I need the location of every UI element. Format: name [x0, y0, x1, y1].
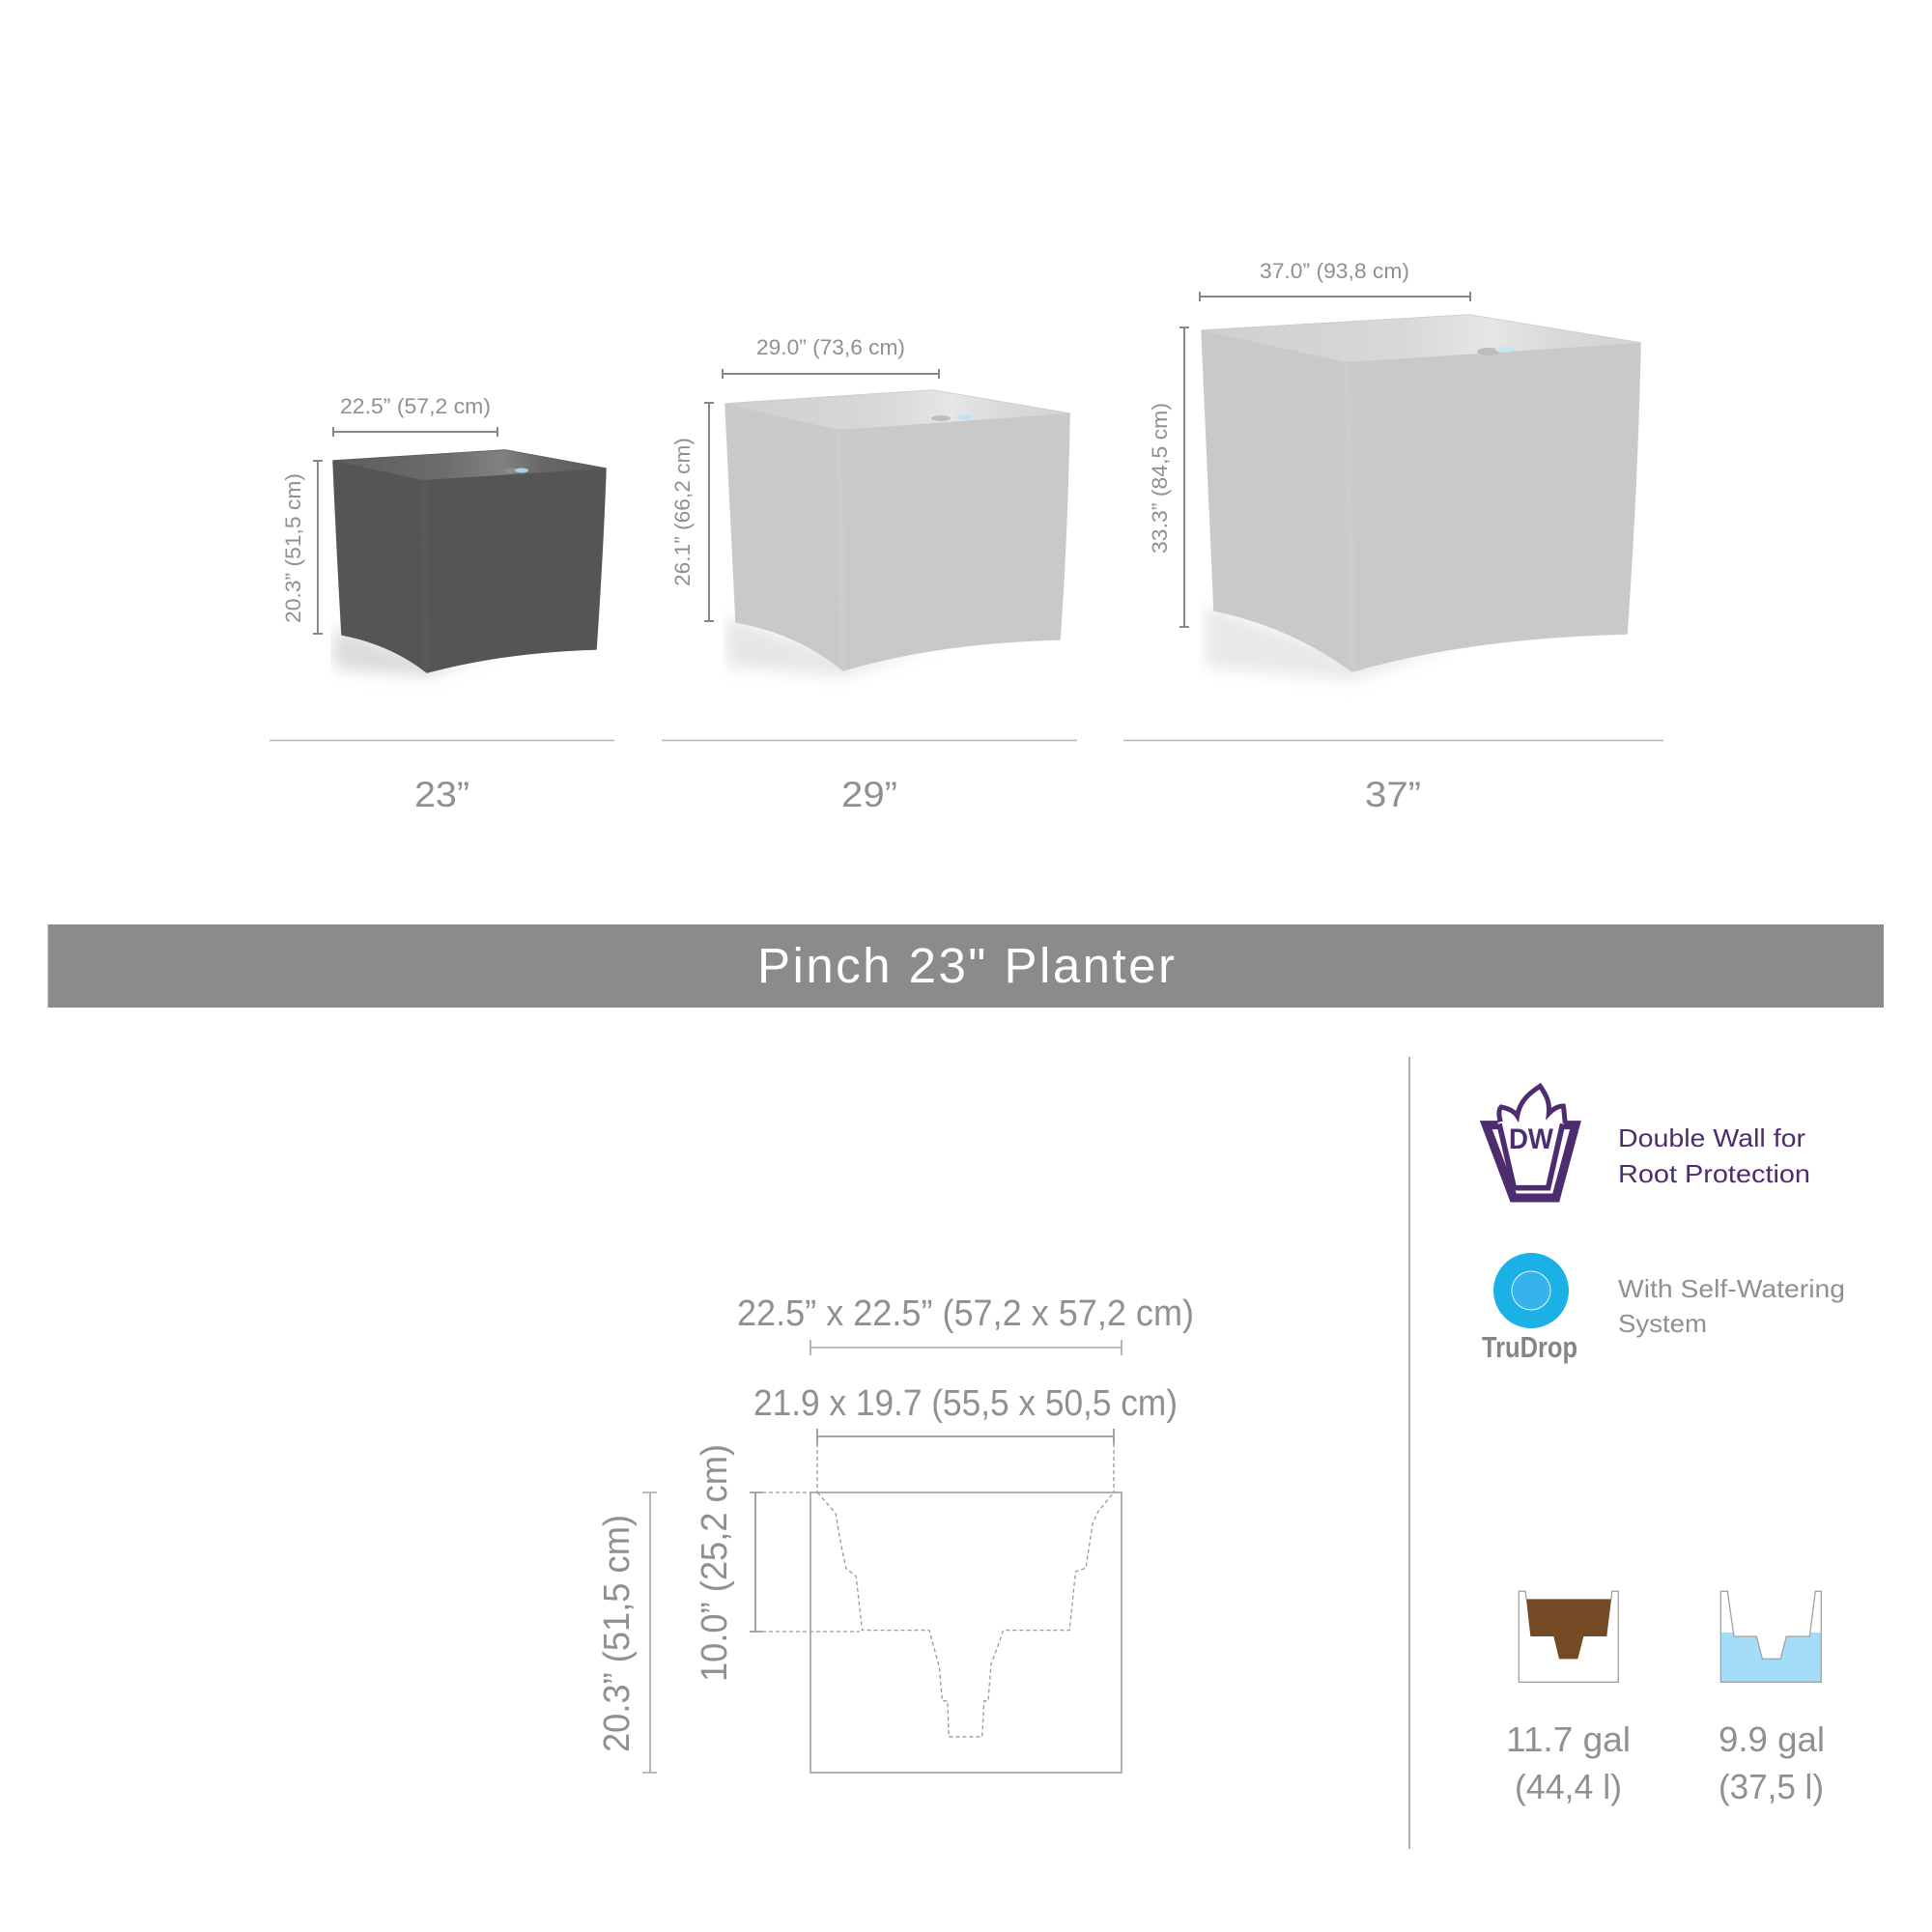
- icon: double wall: [1486, 1086, 1576, 1198]
- planter group: 29 inch: [670, 335, 1069, 676]
- width label: 29 inch: 29.0” (73,6 cm): [756, 335, 905, 359]
- technical cross-section drawing: [597, 1293, 1194, 1773]
- soil volume label: [1506, 1719, 1631, 1806]
- height dimension: 23 inch: [313, 461, 323, 634]
- height label: 37 inch: 33.3” (84,5 cm): [1148, 403, 1172, 554]
- text: double wall: Double Wall for: [1618, 1123, 1805, 1152]
- size label: 23: 23”: [414, 775, 469, 814]
- height label: 29 inch: 26.1” (66,2 cm): [670, 438, 695, 586]
- planter body: 29 inch light grey: [725, 390, 1069, 670]
- width dimension: 29 inch: [723, 369, 939, 379]
- inner width label: 21.9 x 19.7 (55,5 x 50,5 cm): [753, 1383, 1178, 1424]
- water volume label: (37,5 l): [1719, 1767, 1824, 1806]
- water volume label: [1719, 1719, 1825, 1806]
- height dimension: overall: [642, 1492, 657, 1773]
- size label: 37: 37”: [1365, 775, 1421, 814]
- text: self-watering: With Self-Watering: [1618, 1274, 1845, 1303]
- width label: 37 inch: 37.0” (93,8 cm): [1260, 259, 1409, 283]
- height dimension: 37 inch: [1179, 327, 1189, 627]
- inner reservoir dashed profile: [762, 1436, 1114, 1737]
- outer width dimension: [810, 1340, 1122, 1355]
- text: self-watering: System: [1618, 1309, 1707, 1338]
- planter group: 23 inch: [281, 394, 606, 676]
- planter shadow: 37 inch: [1204, 607, 1420, 682]
- planter group: 37 inch: [1148, 259, 1640, 680]
- size label: 29: 29”: [841, 775, 897, 814]
- planter shadow: 23 inch: [334, 628, 493, 676]
- soil volume label: 11.7 gal: [1506, 1719, 1631, 1759]
- title banner: [48, 924, 1884, 1008]
- height label: overall: 20.3” (51,5 cm): [597, 1515, 638, 1752]
- section divider: [1408, 1057, 1410, 1849]
- width dimension: 23 inch: [333, 427, 497, 437]
- icon: soil volume: [1519, 1591, 1618, 1682]
- depth label: inner: 10.0” (25,2 cm): [695, 1444, 735, 1682]
- size baselines: [270, 740, 1663, 742]
- title: Pinch 23" Planter: [757, 938, 1175, 993]
- text: double wall: [1618, 1123, 1810, 1188]
- width label: 23 inch: 22.5” (57,2 cm): [340, 394, 491, 418]
- planter outline box: [810, 1492, 1122, 1773]
- text: double wall: Root Protection: [1618, 1159, 1810, 1188]
- planter body: 37 inch light grey: [1202, 315, 1640, 671]
- planter shadow: 29 inch: [724, 618, 899, 678]
- icon: water volume: [1720, 1591, 1821, 1682]
- icon: TruDrop: TruDrop: [1482, 1330, 1577, 1364]
- height label: 23 inch: 20.3” (51,5 cm): [281, 473, 305, 623]
- width dimension: 37 inch: [1200, 292, 1470, 301]
- planter body: 23 inch charcoal: [333, 450, 606, 672]
- water volume label: 9.9 gal: [1719, 1719, 1825, 1759]
- icon: TruDrop: [1482, 1253, 1577, 1364]
- text: self-watering: [1618, 1274, 1845, 1338]
- depth dimension: inner: [750, 1492, 762, 1632]
- height dimension: 29 inch: [704, 403, 714, 621]
- soil volume label: (44,4 l): [1515, 1767, 1622, 1806]
- inner width dimension: [817, 1429, 1114, 1444]
- icon: double wall: DW: [1509, 1123, 1553, 1155]
- outer width label: 22.5” x 22.5” (57,2 x 57,2 cm): [737, 1293, 1194, 1334]
